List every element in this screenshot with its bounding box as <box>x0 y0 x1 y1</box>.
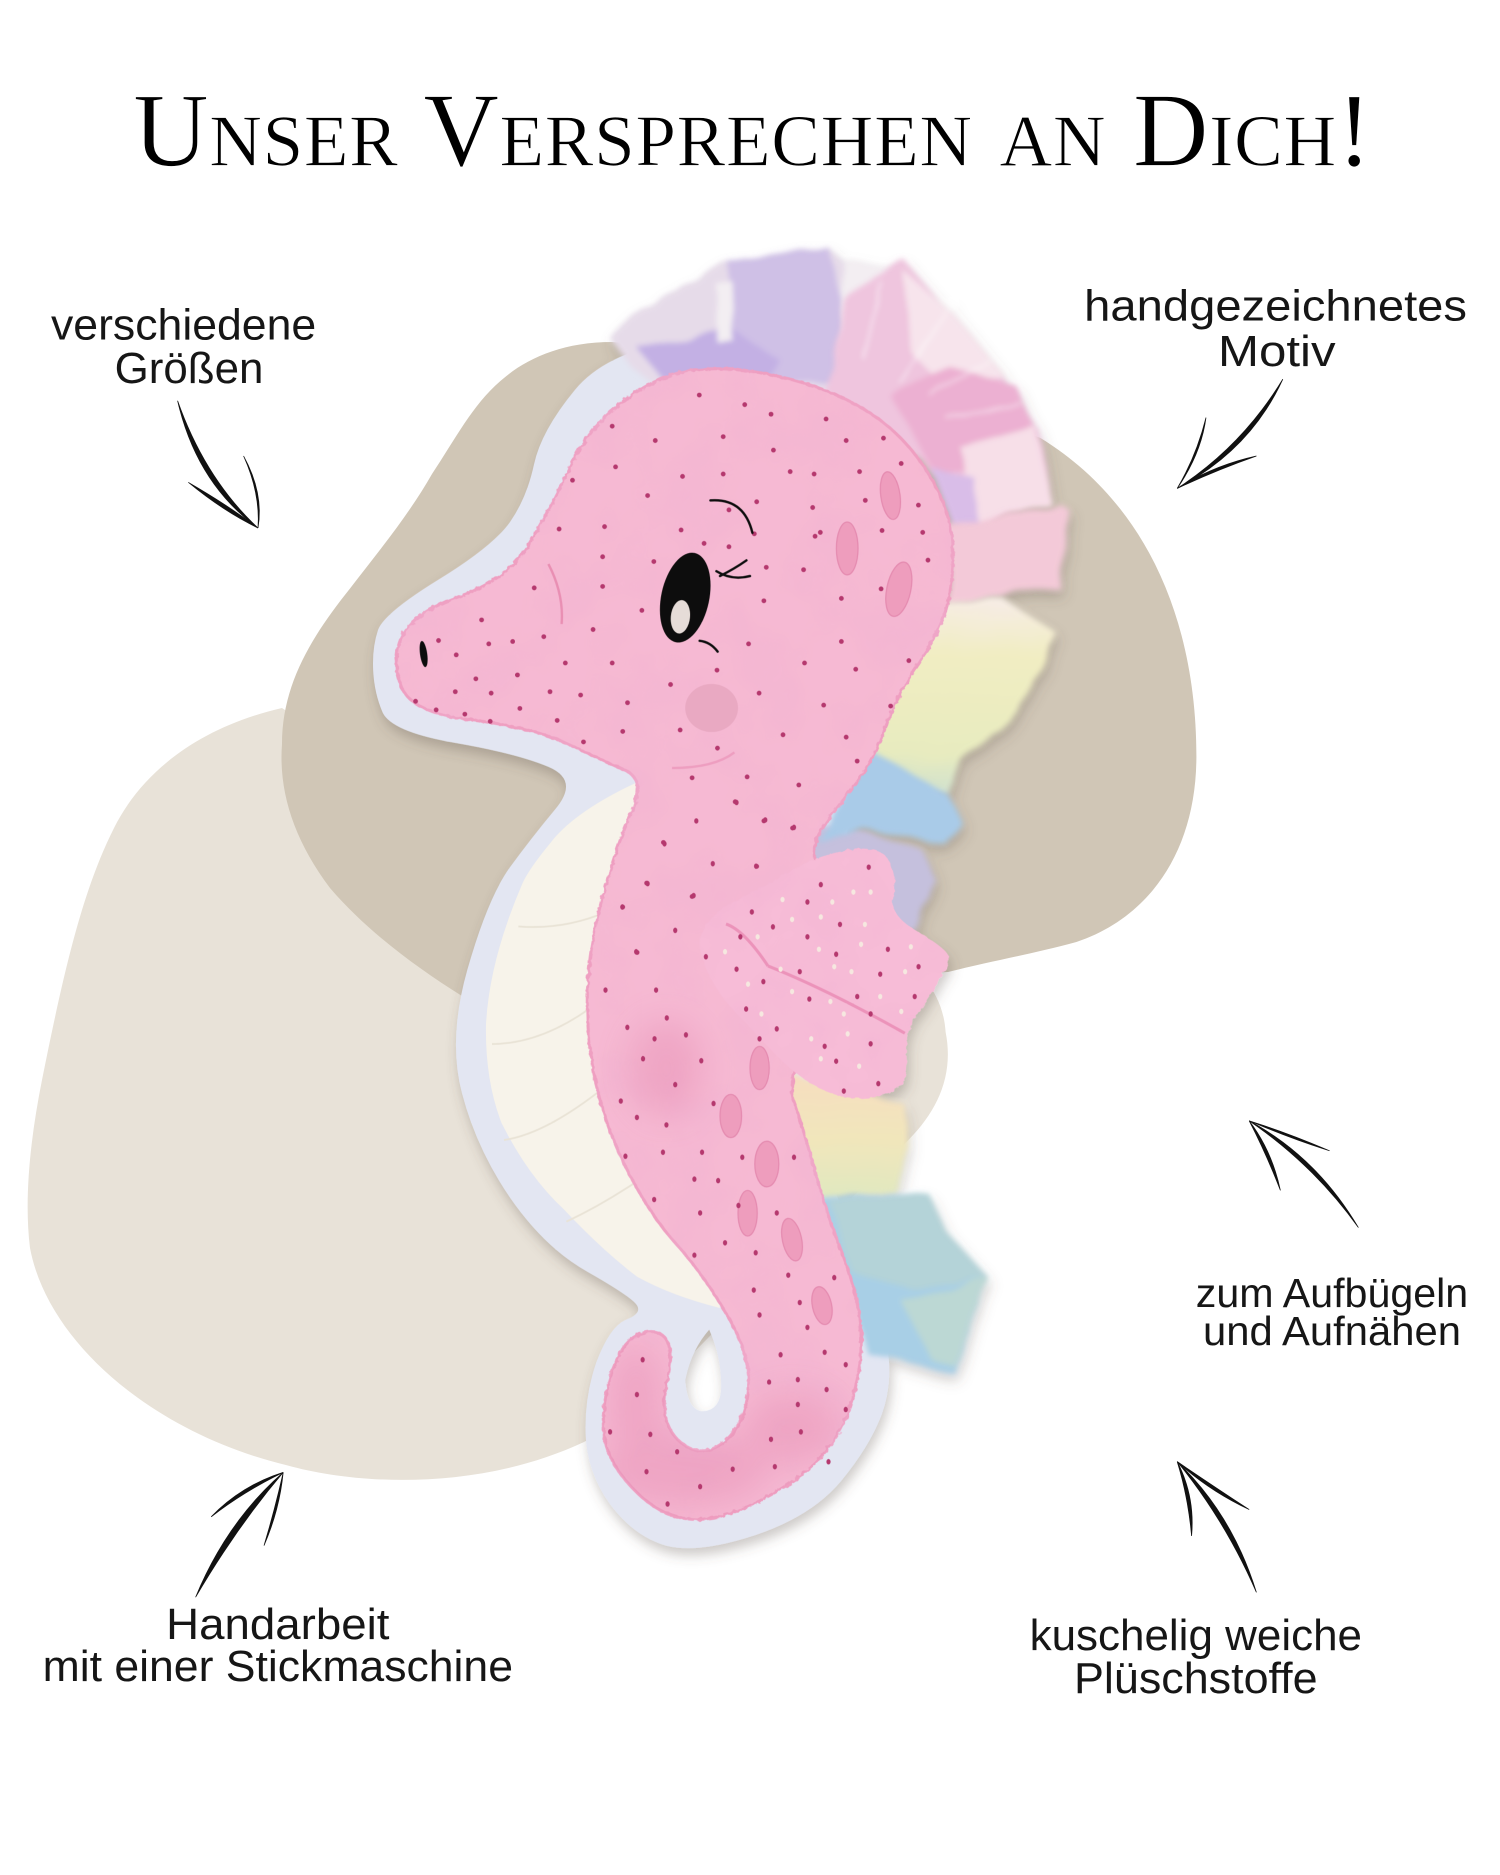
arrow: from kuschelig weiche Plüschstoffe to patch <box>1177 1462 1256 1592</box>
label: handgezeichnetes Motiv <box>1084 282 1467 376</box>
label: zum Aufbügeln und Aufnähen: und Aufnähen <box>1203 1308 1461 1354</box>
dots on body and tail <box>605 802 846 1504</box>
ruffle: lower yellow band <box>768 1068 908 1200</box>
nostril <box>418 640 429 668</box>
ruffle: lavender band <box>806 818 936 930</box>
ruffle: lower blue band <box>816 1193 989 1374</box>
background blob: light beige <box>28 708 948 1480</box>
ruffle: yellow band <box>840 598 1056 794</box>
ruffle: lilac top <box>610 247 898 408</box>
label: Handarbeit mit einer Stickmaschine <box>43 1601 513 1691</box>
label: kuschelig weiche Plüschstoffe: Plüschstoffe <box>1074 1655 1318 1703</box>
label: Handarbeit mit einer Stickmaschine: Handarbeit <box>166 1601 389 1649</box>
ruffle: blue band <box>816 751 962 842</box>
arrow: from verschiedene Größen to patch <box>178 401 259 528</box>
label: kuschelig weiche Plüschstoffe: kuschelig weiche <box>1030 1612 1362 1660</box>
snout wrinkle <box>548 564 562 624</box>
label: zum Aufbügeln und Aufnähen <box>1196 1270 1468 1354</box>
fin <box>700 849 948 1098</box>
label: handgezeichnetes Motiv: Motiv <box>1218 328 1336 376</box>
label: verschiedene Größen <box>51 302 316 393</box>
arrow: from zum Aufbügeln to patch <box>1249 1121 1358 1228</box>
ruffle: pink band <box>948 505 1070 606</box>
label: verschiedene Größen: verschiedene <box>51 302 316 350</box>
dots on head <box>416 395 928 952</box>
cheek <box>685 684 738 732</box>
arrow: from handgezeichnetes Motiv to patch <box>1177 379 1283 488</box>
cream belly <box>486 780 720 1308</box>
arrow: from Handarbeit to patch <box>196 1472 283 1597</box>
label: handgezeichnetes Motiv: handgezeichnetes <box>1084 282 1467 330</box>
label: verschiedene Größen: Größen <box>115 345 263 393</box>
gill ovals on head <box>836 470 916 619</box>
label: Handarbeit mit einer Stickmaschine: mit einer Stickmaschine <box>43 1643 513 1691</box>
scale ovals on body <box>720 1046 835 1326</box>
eye <box>652 500 752 652</box>
background blob: darker taupe <box>281 342 1196 996</box>
label: zum Aufbügeln und Aufnähen: zum Aufbügeln <box>1196 1270 1468 1316</box>
title: Unser Versprechen an Dich! <box>133 73 1372 189</box>
felt backing <box>373 339 951 1548</box>
ruffle: pink crest <box>826 256 1051 528</box>
pink plush body <box>396 369 953 1519</box>
mouth line <box>672 752 734 768</box>
seahorse patch illustration <box>373 247 1070 1548</box>
label: kuschelig weiche Plüschstoffe <box>1030 1612 1362 1703</box>
